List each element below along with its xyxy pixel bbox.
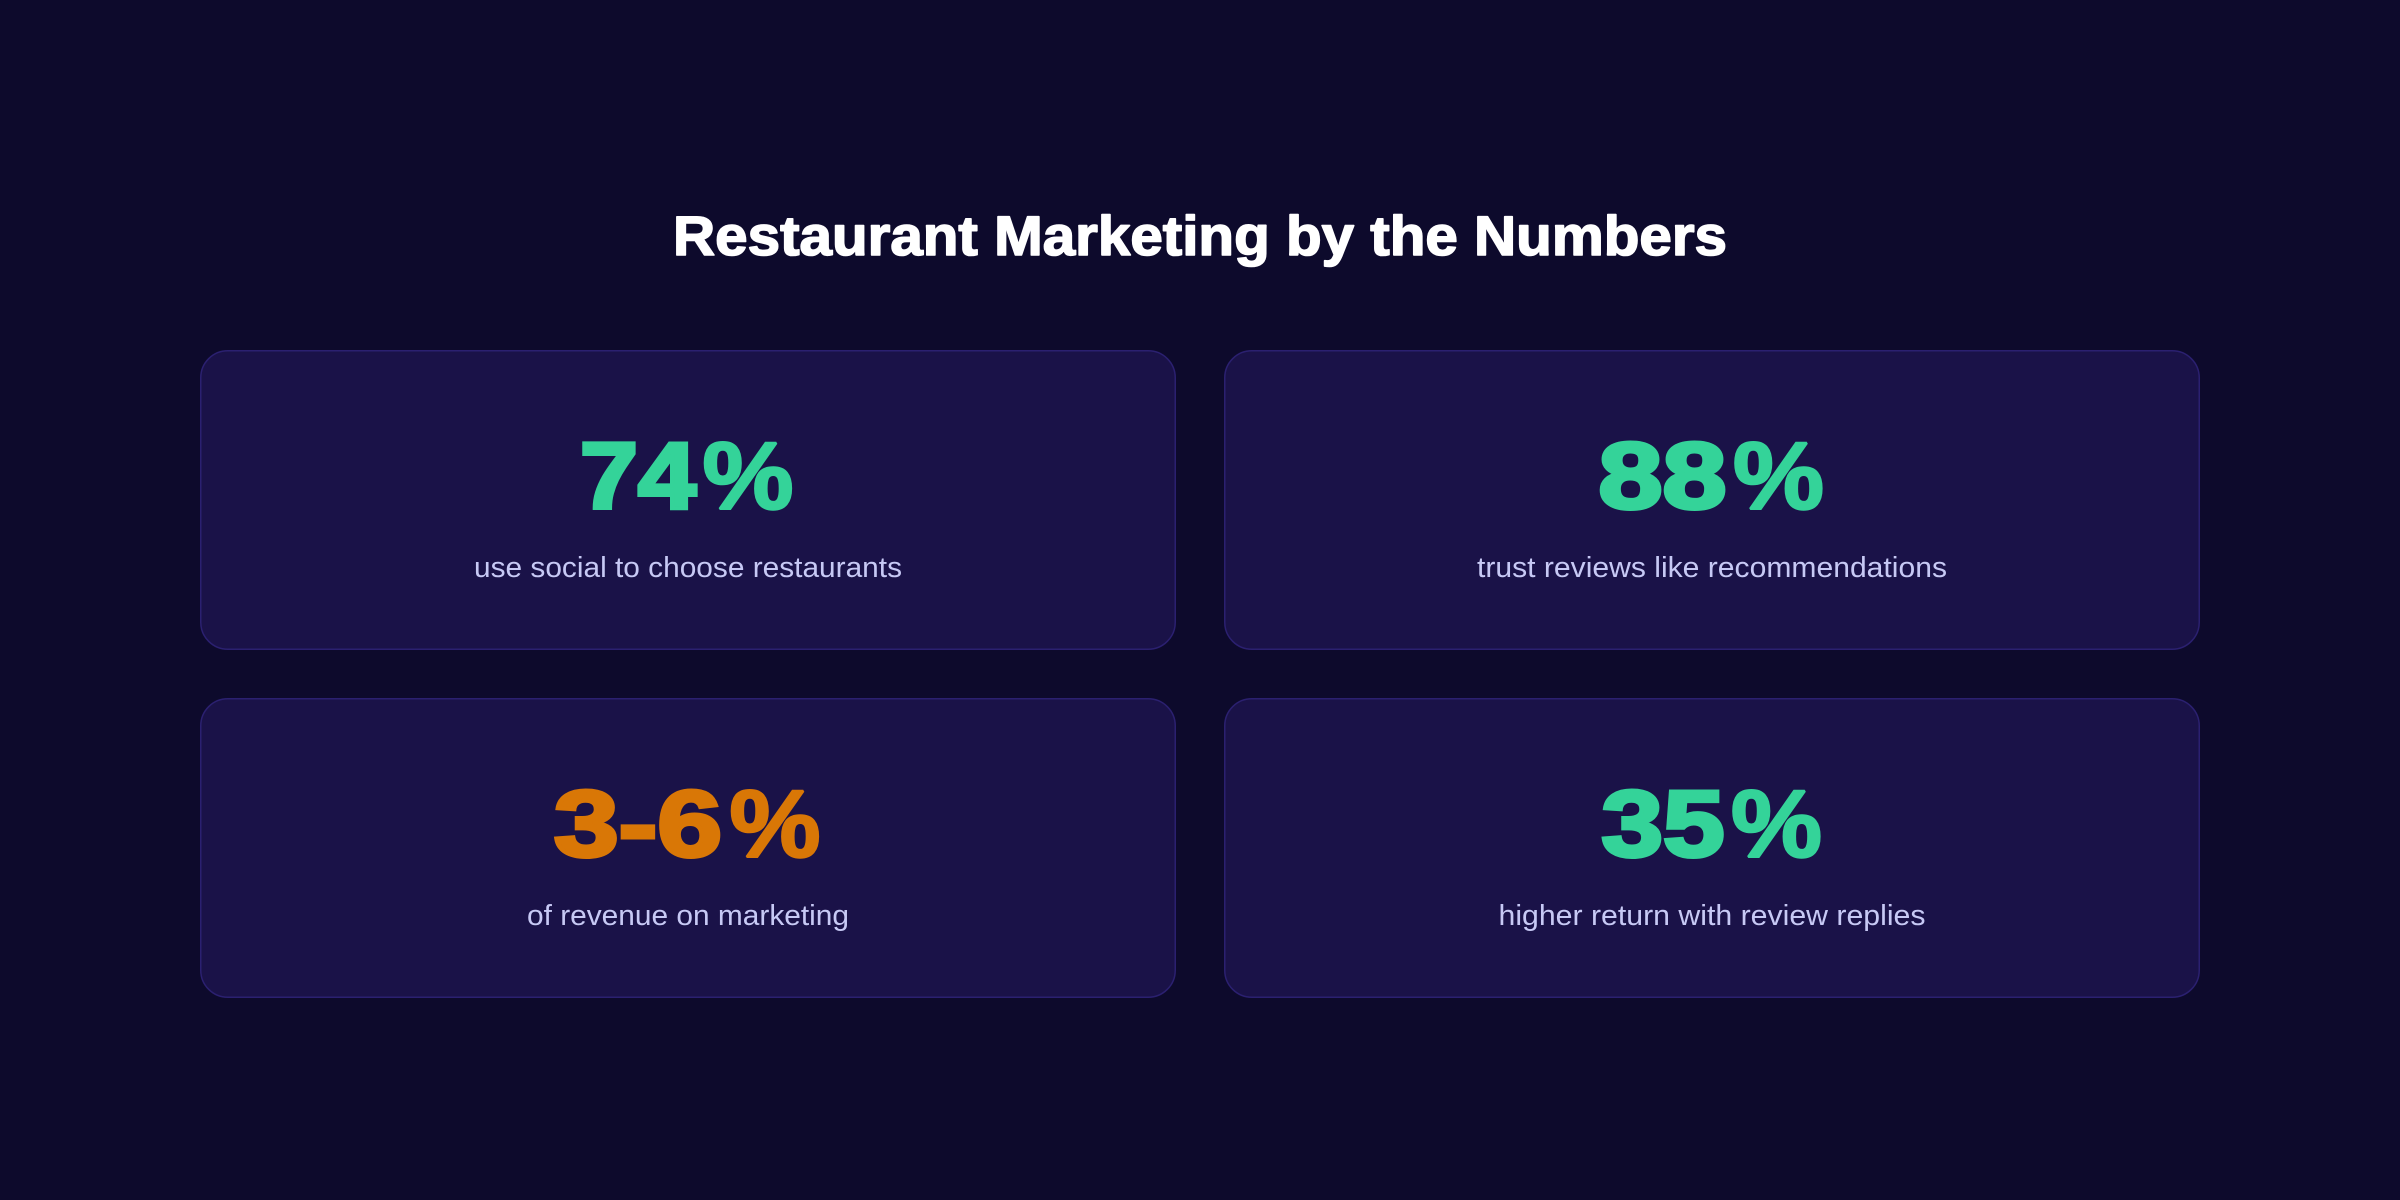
stat value: 74% bbox=[580, 423, 794, 530]
stat value: 74%: % bbox=[702, 423, 794, 530]
stat value: 35% bbox=[1602, 771, 1822, 878]
stat value: 88%: % bbox=[1733, 423, 1824, 530]
card background bbox=[201, 351, 1175, 649]
stat label: trust reviews like recommendations bbox=[1477, 552, 1947, 584]
stat label: of revenue on marketing bbox=[527, 900, 849, 932]
card background bbox=[1225, 351, 2199, 649]
panel: 35% stat bbox=[1225, 699, 2199, 997]
stat value: 35%: 35 bbox=[1602, 771, 1724, 876]
panel: 88% stat bbox=[1225, 351, 2199, 649]
stat value: 88% bbox=[1598, 423, 1824, 530]
stat label: higher return with review replies bbox=[1498, 900, 1926, 932]
panel: 74% stat bbox=[201, 351, 1175, 649]
stat value: 3-6%: % bbox=[730, 771, 820, 878]
stat value: 3-6% bbox=[554, 771, 820, 878]
stat value: 35%: % bbox=[1731, 771, 1822, 878]
stat value: 88%: 88 bbox=[1598, 423, 1726, 528]
stat label: use social to choose restaurants bbox=[474, 552, 902, 584]
stat value: 3-6%: 3-6 bbox=[554, 771, 722, 876]
stat value: 74%: 74 bbox=[580, 423, 696, 528]
card background bbox=[201, 699, 1175, 997]
card background bbox=[1225, 699, 2199, 997]
panel: 3-6% stat bbox=[201, 699, 1175, 997]
title: Restaurant Marketing by the Numbers bbox=[673, 204, 1727, 267]
